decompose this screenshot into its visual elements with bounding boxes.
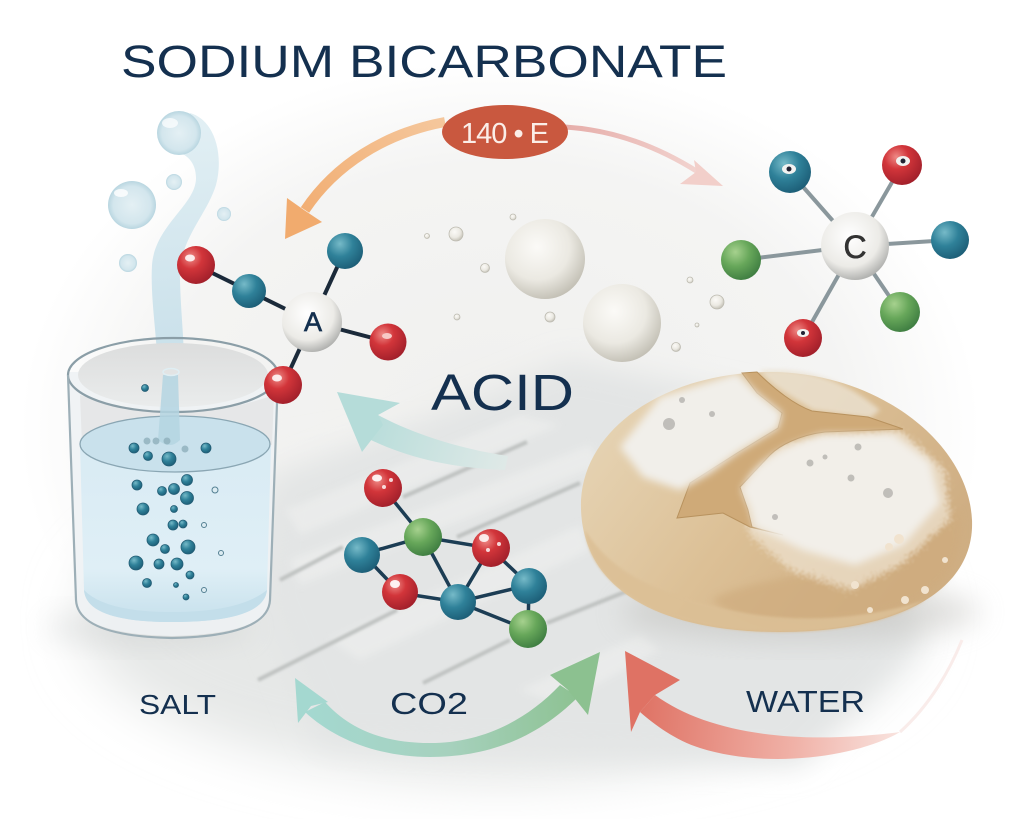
beaker shadow (45, 608, 255, 648)
molecule A (177, 233, 406, 404)
flour top right (760, 370, 880, 418)
arrow: teal to salt and green to bread (295, 652, 600, 757)
rising water stream (152, 113, 219, 440)
green head (550, 652, 600, 715)
molecule A: A (304, 307, 322, 337)
molecule C: C (843, 229, 867, 265)
badge: 140 E (442, 105, 568, 159)
flour halo (735, 430, 950, 590)
arrow: teal to beaker molecule (337, 392, 508, 470)
arrow: pink curved to molecule C (565, 127, 723, 186)
beaker of water (68, 338, 278, 638)
arrow: orange curved to beaker molecule (285, 122, 445, 239)
bubbles above beaker (108, 111, 231, 272)
flour right (742, 434, 940, 565)
crumbs (663, 397, 893, 520)
bread loaf (581, 370, 980, 642)
second pearl bubble (583, 284, 661, 362)
bubbles in water (129, 384, 211, 600)
glass inner back (78, 343, 268, 407)
arrow: red from water to bread (625, 640, 962, 759)
large pearl bubble (505, 219, 585, 299)
flour left (620, 373, 782, 490)
teal head (295, 678, 328, 723)
label: ACID: ACID (431, 364, 574, 421)
stream entering water (158, 375, 180, 445)
molecule CO2 cluster (344, 469, 547, 648)
table stripes (258, 415, 660, 705)
label: WATER: WATER (746, 684, 865, 719)
badge: 140 E: 140 • E (461, 118, 549, 150)
label: CO2: CO2 (390, 686, 468, 721)
title: SODIUM BICARBONATE (121, 36, 727, 87)
water (80, 445, 271, 622)
molecule C (721, 145, 969, 357)
bread lower crust (712, 510, 960, 625)
crack (677, 372, 903, 535)
floating particles (424, 214, 724, 362)
label: SALT: SALT (139, 689, 216, 720)
